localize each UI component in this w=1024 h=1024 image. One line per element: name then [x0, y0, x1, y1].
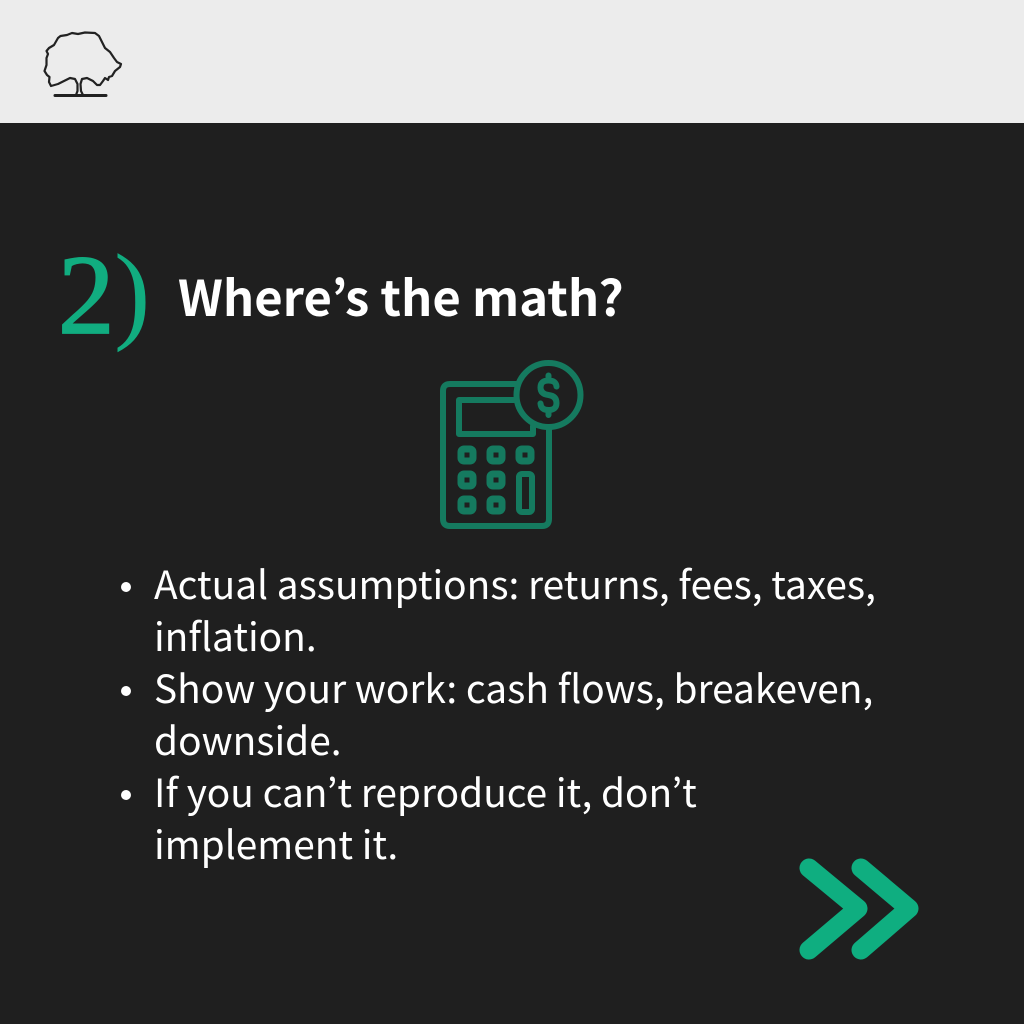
bullet: reproduce: If you can’t reproduce it, don’t — [154, 763, 697, 819]
bullet: assumptions — [121, 555, 876, 663]
header band — [0, 0, 1024, 123]
number: 2): ) — [114, 232, 150, 353]
bullet list — [121, 555, 876, 871]
bullet: assumptions: inflation. — [154, 607, 317, 663]
heading: Where’s the math? — [178, 260, 624, 331]
number: 2): 2 — [58, 233, 114, 358]
bullet: assumptions: Actual assumptions: returns, fees, taxes, — [154, 555, 876, 611]
bullet: reproduce — [121, 763, 697, 871]
bullet: show your work — [121, 659, 873, 767]
icon: tree logo — [43, 31, 122, 97]
number: 2) — [58, 232, 150, 358]
bullet: show your work: Show your work: cash flows, breakeven, — [154, 659, 873, 715]
bullet: reproduce: implement it. — [154, 815, 398, 871]
bullet: show your work: downside. — [154, 711, 342, 767]
